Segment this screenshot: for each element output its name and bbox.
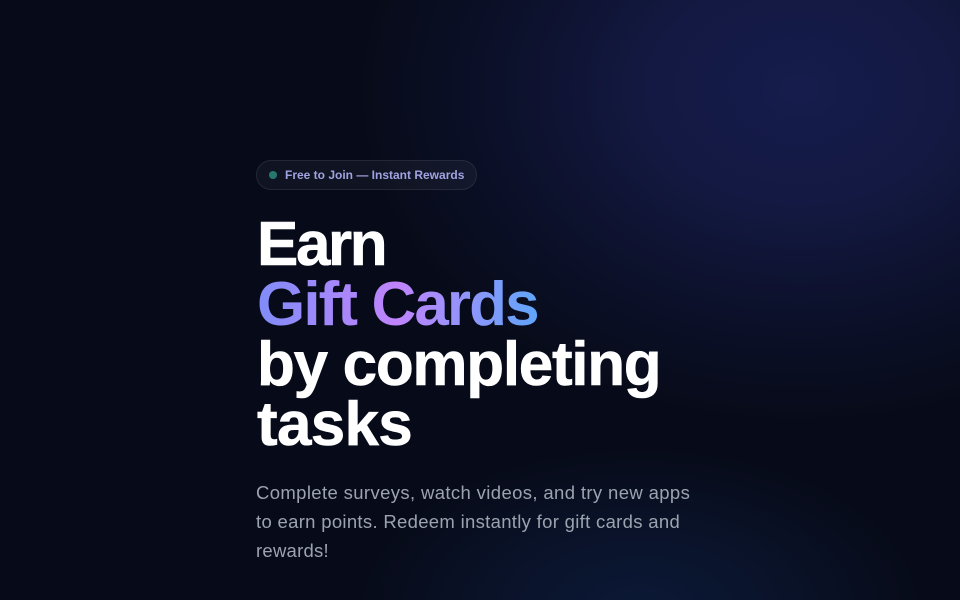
heading line: Earn: Earn — [257, 210, 385, 279]
heading line: by completing: by completing — [257, 330, 660, 399]
badge status dot — [269, 171, 277, 179]
badge — [256, 160, 477, 190]
description text: Complete surveys, watch videos, and try new apps — [256, 482, 690, 503]
heading line: tasks: tasks — [257, 390, 412, 459]
description text: to earn points. Redeem instantly for gift cards and — [256, 511, 680, 532]
heading line: Gift Cards gradient: Gift Cards — [257, 270, 538, 339]
badge text: Free to Join — Instant Rewards — [285, 168, 464, 182]
description text — [256, 482, 690, 561]
description text: rewards! — [256, 540, 329, 561]
heading — [257, 210, 660, 459]
